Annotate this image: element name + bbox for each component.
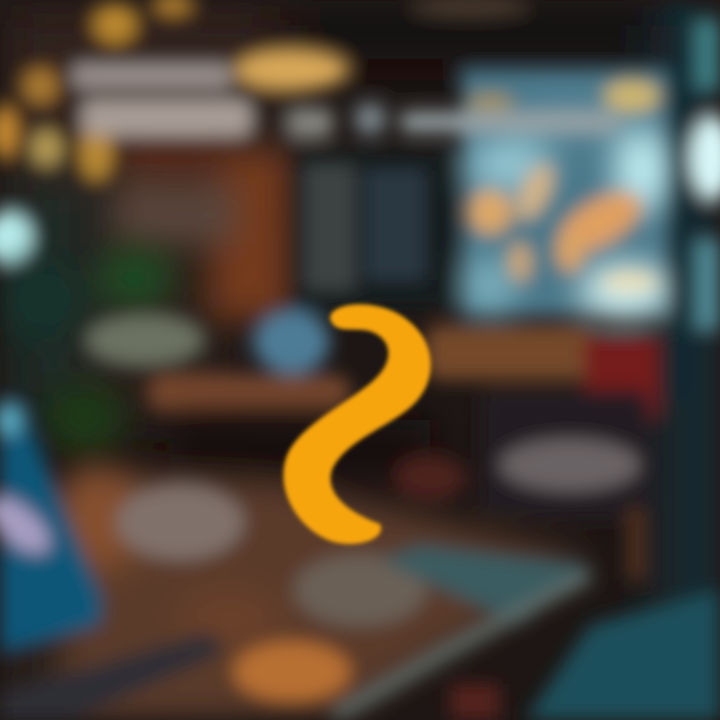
- grey armchair: [394, 390, 650, 580]
- plants: [0, 248, 173, 452]
- ceiling lights: [0, 0, 660, 180]
- blurred title text bars: [72, 64, 620, 138]
- table leg: [450, 684, 500, 720]
- grey cushion left: [87, 316, 203, 364]
- foreground wooden table: [55, 470, 590, 720]
- red chair: [584, 335, 660, 420]
- hanging lamp: [236, 50, 348, 90]
- small blue laptop: [254, 310, 330, 374]
- orange saucer glow: [234, 642, 350, 702]
- map continents: [468, 159, 658, 290]
- foreground table edge: [335, 575, 590, 716]
- wall map panel: [462, 70, 671, 318]
- floor teal: [525, 590, 720, 720]
- dark shelf panel: [290, 150, 455, 310]
- back table top: [150, 325, 595, 480]
- left window glow: [0, 212, 32, 264]
- left foreground laptop: [0, 400, 225, 720]
- right window strip: [672, 0, 720, 400]
- orange question mark shape: [283, 304, 431, 544]
- brick column: [115, 130, 290, 320]
- map light patches: [464, 102, 671, 318]
